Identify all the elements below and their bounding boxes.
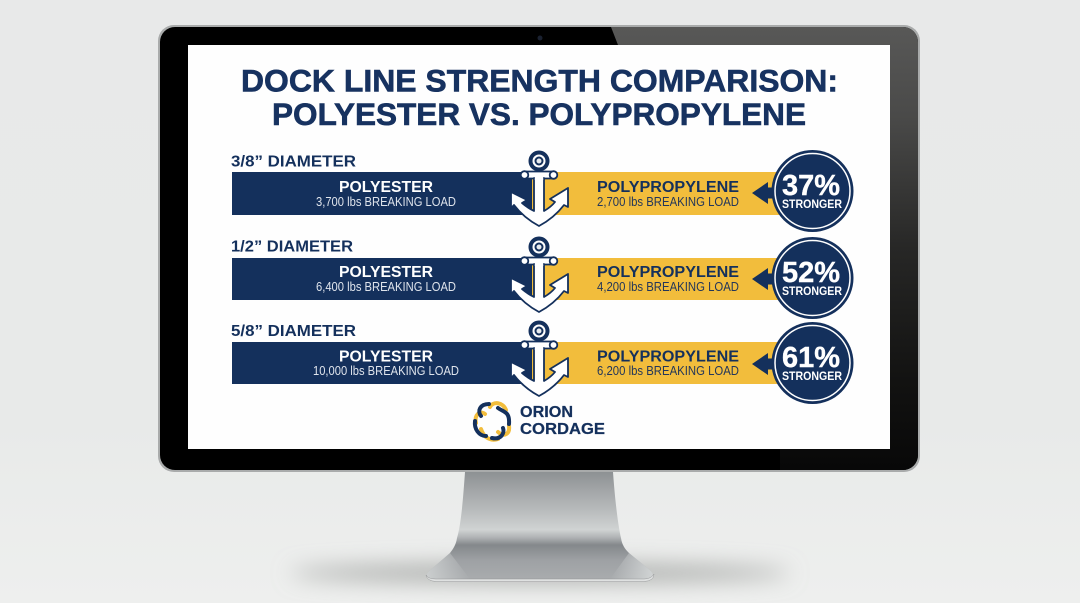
screen (188, 45, 890, 449)
polyester label: POLYESTER (339, 179, 433, 196)
diameter label: 3/8” DIAMETER (231, 154, 356, 170)
arrow (752, 353, 780, 375)
polypropylene label: POLYPROPYLENE (597, 348, 739, 366)
polypropylene label (597, 179, 739, 209)
badge: 52% stronger (772, 237, 854, 319)
row: 1/2 inch diameter (231, 237, 854, 319)
polypropylene label: POLYPROPYLENE (597, 264, 739, 281)
diameter label: 1/2” DIAMETER (231, 238, 353, 256)
infographic scene (158, 25, 920, 592)
badge: 61% stronger: 61% (782, 342, 840, 374)
icon: anchor (511, 152, 568, 226)
polyester label (316, 179, 456, 209)
polyester label: 6,400 lbs BREAKING LOAD (316, 280, 456, 294)
monitor frame (158, 25, 920, 472)
icon: anchor (511, 238, 568, 312)
logo wordmark: CORDAGE (520, 421, 605, 438)
polyester bar (232, 258, 532, 300)
polypropylene label (597, 348, 739, 378)
webcam (538, 36, 542, 40)
polypropylene label: 6,200 lbs BREAKING LOAD (597, 364, 739, 378)
arrow (752, 268, 780, 290)
title: POLYESTER VS. POLYPROPYLENE (272, 96, 806, 132)
polypropylene bar (532, 172, 782, 215)
icon: anchor (511, 322, 568, 396)
polyester bar (232, 172, 532, 215)
polyester label: POLYESTER (339, 264, 433, 281)
badge: 37% stronger: 37% (782, 170, 840, 202)
logo wordmark (520, 404, 605, 438)
polyester label: 3,700 lbs BREAKING LOAD (316, 195, 456, 209)
title (241, 62, 838, 132)
badge: 61% stronger: STRONGER (782, 371, 843, 383)
polypropylene label: 4,200 lbs BREAKING LOAD (597, 280, 739, 294)
icon: rope knot ring (475, 403, 509, 440)
monitor stand (426, 472, 654, 582)
bezel glare (611, 27, 918, 470)
polyester bar (232, 342, 532, 384)
badge: 61% stronger (772, 322, 854, 404)
polypropylene bar (532, 258, 782, 300)
foot highlights (427, 553, 470, 579)
title: DOCK LINE STRENGTH COMPARISON: (241, 62, 838, 98)
polypropylene label: POLYPROPYLENE (597, 179, 739, 196)
polyester label (316, 264, 456, 294)
polypropylene bar (532, 342, 782, 384)
badge: 52% stronger: STRONGER (782, 286, 843, 298)
arrow (752, 182, 780, 204)
row: 3/8 inch diameter (231, 150, 854, 232)
polyester label: POLYESTER (339, 348, 433, 366)
polypropylene label: 2,700 lbs BREAKING LOAD (597, 195, 739, 209)
diameter label: 5/8” DIAMETER (231, 323, 356, 340)
logo: Orion Cordage (475, 403, 605, 440)
polyester label: 10,000 lbs BREAKING LOAD (313, 364, 459, 378)
badge: 37% stronger (772, 150, 854, 232)
polyester label (313, 348, 459, 378)
monitor shadow on floor (290, 564, 790, 582)
logo wordmark: ORION (520, 404, 573, 421)
polypropylene label (597, 264, 739, 294)
badge: 52% stronger: 52% (782, 257, 840, 289)
badge: 37% stronger: STRONGER (782, 199, 843, 211)
row: 5/8 inch diameter (231, 322, 854, 404)
